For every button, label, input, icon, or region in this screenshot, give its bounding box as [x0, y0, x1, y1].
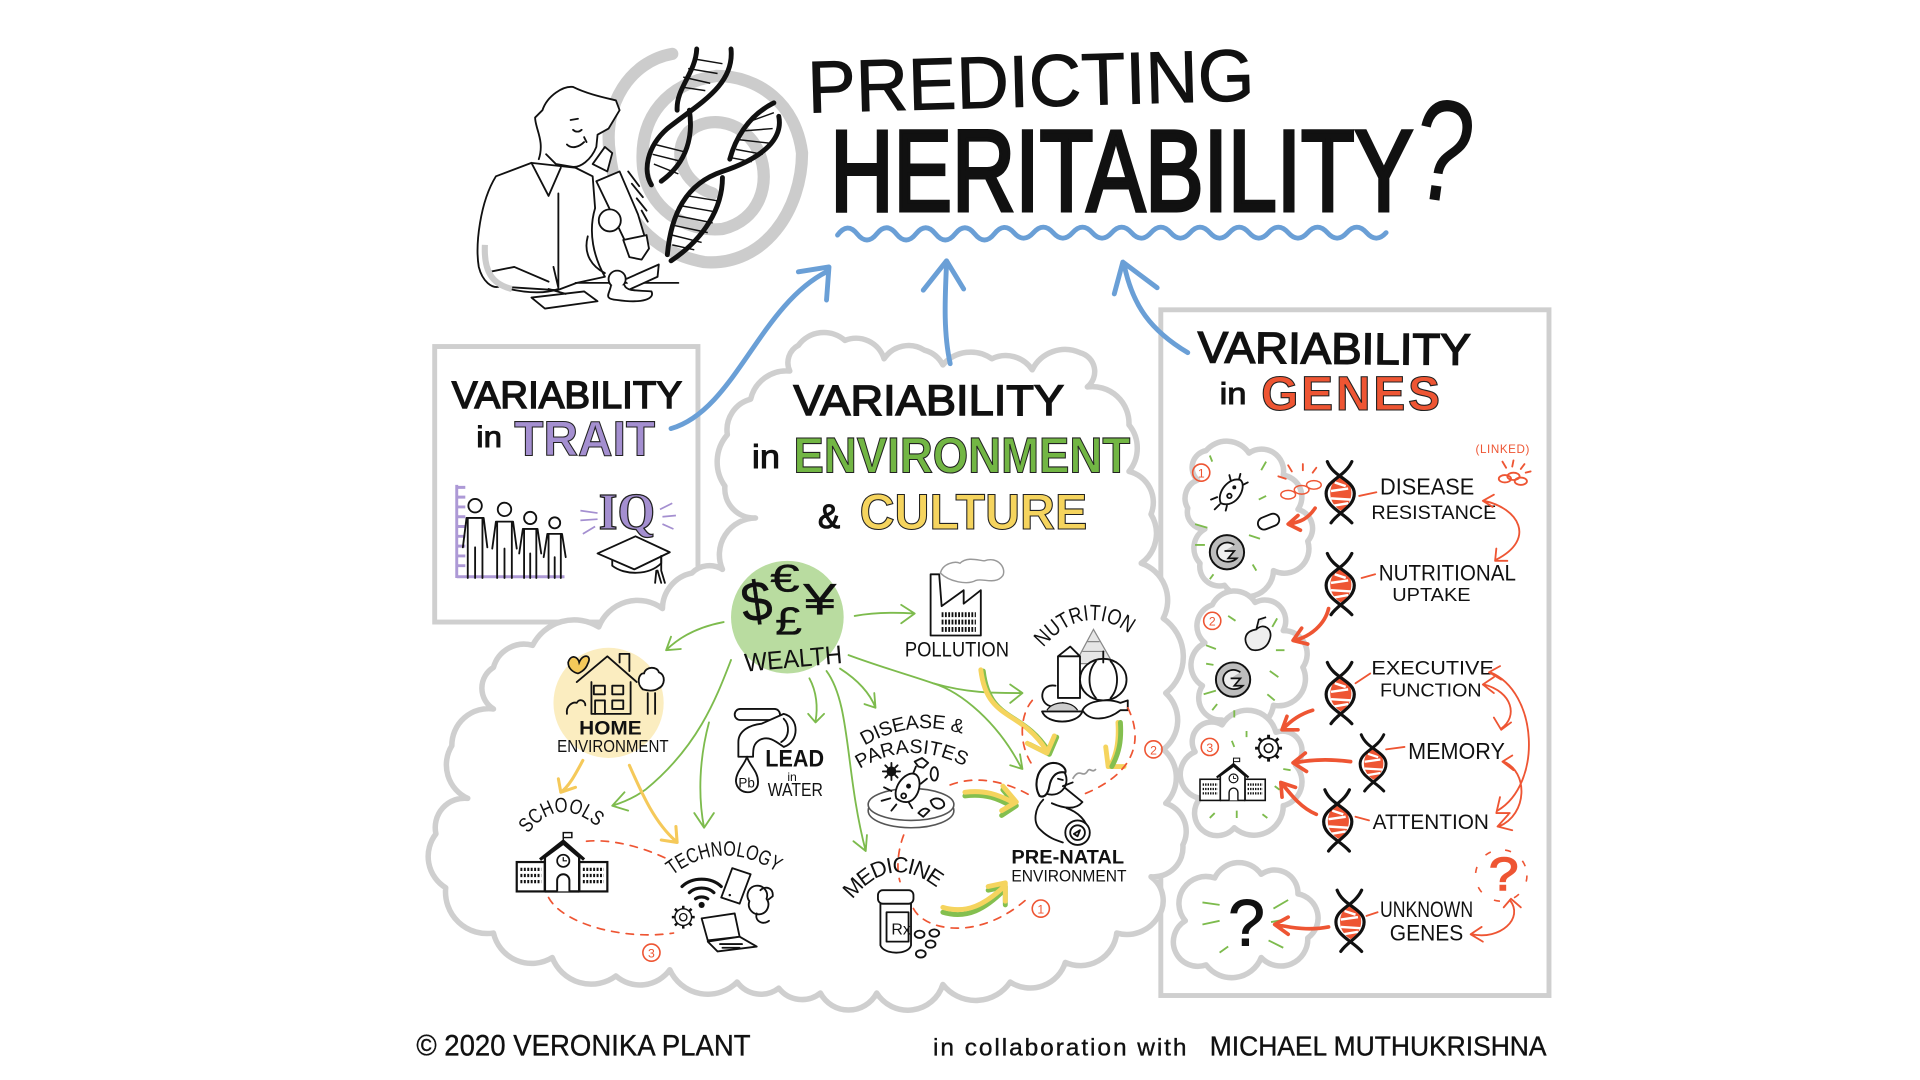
- node: pre-natal environment: ENVIRONMENT: [1011, 867, 1127, 886]
- icon: IQ graduation cap: IQ: [599, 484, 655, 541]
- panel: genes: [1161, 310, 1549, 996]
- heading: variability in genes: VARIABILITY: [1197, 323, 1471, 375]
- icon: scientist with microscope: [478, 87, 678, 309]
- gene labels: UNKNOWN: [1380, 897, 1473, 922]
- gene cloud 1: [1185, 441, 1313, 597]
- grey spiral behind DNA: [609, 54, 802, 262]
- yellow-green arrow: pollution to pre-natal: [981, 670, 1057, 754]
- gene cloud 4: unknown: [1173, 863, 1318, 978]
- marker 2: 2: [1150, 743, 1157, 757]
- node: lead in water: WATER: [768, 779, 823, 800]
- node: medicine: [842, 857, 944, 958]
- node: technology: TECHNOLOGY: [664, 841, 784, 873]
- linked annotation: [1476, 443, 1531, 485]
- node: disease and parasites: PARASITES: [854, 739, 968, 768]
- node: wealth: €: [770, 557, 800, 600]
- heading: variability in trait: TRAIT: [514, 413, 655, 467]
- node: pre-natal environment: [1011, 763, 1127, 886]
- node: schools: [516, 798, 608, 893]
- environment and culture cloud: [428, 332, 1186, 1010]
- yellow-green arrow: nutrition to pre-natal: [1106, 722, 1124, 767]
- node: home environment: [553, 648, 669, 758]
- gene labels: ATTENTION: [1373, 811, 1489, 834]
- blue arrow: environment to heritability: [923, 261, 964, 364]
- heading: variability in environment and culture: VARIABILITY: [793, 377, 1064, 425]
- heading: variability in genes: GENES: [1261, 368, 1440, 421]
- title: HERITABILITY: [830, 108, 1413, 236]
- red double arrows between traits: [1483, 495, 1529, 830]
- marker 1: [1032, 900, 1049, 917]
- footer: credit: © 2020 VERONIKA PLANT: [416, 1030, 751, 1063]
- group: gene cloud 1 contents: [1193, 456, 1281, 579]
- linked chain: [1278, 464, 1321, 499]
- heading: variability in genes: [1197, 323, 1471, 421]
- footer: collaborator name: MICHAEL MUTHUKRISHNA: [1210, 1031, 1547, 1062]
- group: gene cloud 2 contents: 2: [1209, 615, 1216, 629]
- yellow arrow: home to schools: [558, 760, 583, 792]
- heading: variability in environment and culture: [752, 377, 1131, 540]
- wavy blue underline: [838, 227, 1386, 240]
- marker 3: 3: [648, 947, 655, 961]
- icon: height ruler: [457, 485, 564, 578]
- gene labels: NUTRITIONAL: [1379, 560, 1516, 585]
- node: lead in water: Pb: [738, 775, 755, 790]
- node: medicine: MEDICINE: [842, 857, 944, 898]
- gene cloud 3: [1180, 710, 1302, 836]
- title: PREDICTING: [806, 33, 1255, 129]
- green arrows from wealth: [612, 605, 1022, 851]
- marker 2: [1145, 741, 1162, 758]
- icon: four people: [463, 499, 566, 578]
- node: nutrition: NUTRITION: [1033, 604, 1136, 646]
- gene labels: FUNCTION: [1380, 680, 1482, 701]
- heading: variability in environment and culture: CULTURE: [860, 484, 1087, 540]
- red arrows to clouds: [1275, 508, 1351, 934]
- gene labels: EXECUTIVE: [1371, 658, 1494, 680]
- heading: variability in genes: in: [1220, 377, 1247, 411]
- blue arrow: genes to heritability: [1114, 262, 1188, 353]
- node: home environment: ENVIRONMENT: [557, 736, 669, 756]
- node: nutrition: [1033, 604, 1136, 722]
- yellow-green arrow: medicine to pre-natal: [943, 883, 1005, 915]
- node: pre-natal environment: PRE-NATAL: [1011, 846, 1124, 868]
- unknown genes red question: [1471, 848, 1527, 942]
- yellow arrow: home to technology: [629, 765, 677, 842]
- heading: variability in environment and culture: in: [752, 439, 780, 476]
- icon: DNA helix: [647, 49, 779, 261]
- gene labels: MEMORY: [1408, 738, 1505, 764]
- gene labels: GENES: [1390, 920, 1463, 945]
- gene labels: UPTAKE: [1392, 584, 1471, 605]
- group: gene cloud 4 contents: ?: [1228, 886, 1265, 960]
- node: pollution: [905, 559, 1009, 661]
- node: lead in water: LEAD: [765, 746, 824, 773]
- panel: trait: [435, 347, 698, 622]
- node: disease and parasites: [854, 714, 968, 828]
- node: pollution: POLLUTION: [905, 638, 1009, 661]
- title: ?: [1403, 66, 1484, 235]
- linked annotation: (LINKED): [1476, 443, 1530, 456]
- heading: variability in trait: VARIABILITY: [452, 375, 682, 417]
- group: gene cloud 1 contents: 1: [1198, 467, 1205, 481]
- node: wealth: WEALTH: [743, 641, 843, 678]
- gene labels: [1371, 474, 1516, 945]
- gene cloud 2: [1191, 591, 1307, 730]
- marker 1: 1: [1037, 902, 1044, 916]
- heading: variability in environment and culture: &: [818, 498, 840, 536]
- blue arrow: trait to heritability: [671, 267, 829, 429]
- node: lead in water: [735, 709, 824, 800]
- footer: collaboration: in collaboration with: [933, 1035, 1187, 1062]
- node: home environment: HOME: [579, 718, 642, 740]
- DNA icons: [1324, 462, 1386, 951]
- node: schools: SCHOOLS: [519, 798, 604, 832]
- yellow-green arrow: disease to pre-natal: [965, 786, 1016, 816]
- gene labels: RESISTANCE: [1371, 502, 1496, 524]
- heading: variability in trait: in: [476, 421, 502, 454]
- heading: variability in environment and culture: ENVIRONMENT: [793, 428, 1131, 484]
- node: wealth: [731, 557, 844, 678]
- gene labels: DISEASE: [1380, 474, 1474, 500]
- group: gene cloud 3 contents: [1200, 731, 1291, 818]
- node: technology: [664, 841, 784, 952]
- group: gene cloud 4 contents: [1202, 886, 1288, 960]
- node: wealth: ¥: [802, 576, 837, 625]
- node: lead in water: in: [787, 770, 797, 784]
- node: medicine: Rx: [891, 921, 911, 938]
- icon: IQ graduation cap: [580, 484, 676, 583]
- unknown genes red question: ?: [1489, 848, 1518, 900]
- marker 3: [643, 944, 660, 961]
- heading: variability in trait: [452, 375, 682, 467]
- node: disease and parasites: DISEASE &: [860, 714, 963, 745]
- group: gene cloud 3 contents: 3: [1206, 741, 1213, 755]
- red dashed links to pre-natal: [898, 700, 1135, 928]
- red dashed link: schools technology: [549, 841, 673, 935]
- group: gene cloud 2 contents: [1204, 612, 1284, 718]
- node: wealth: £: [775, 600, 802, 643]
- title: [806, 33, 1484, 236]
- node: wealth: $: [737, 568, 776, 635]
- red connectors: DNA to labels: [1356, 492, 1404, 916]
